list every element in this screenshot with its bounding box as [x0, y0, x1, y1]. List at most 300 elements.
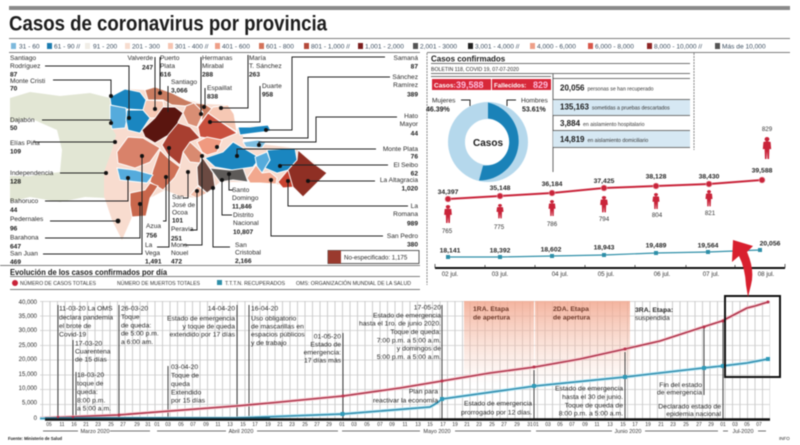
icons: fallecidos por día	[444, 137, 771, 223]
map labels: east: Sánchez	[392, 74, 418, 81]
map labels: east: Samaná	[393, 55, 418, 62]
fallecidos values: 786	[547, 221, 558, 228]
donut chart: casos por sexo: 53.61%	[522, 106, 547, 114]
annotation: 17 mayo: Estado de emergencia	[373, 312, 441, 320]
arrow: from box to July chart	[732, 240, 753, 297]
annotation: 3 abril: queda	[171, 381, 190, 388]
y axis labels: 0	[34, 416, 38, 422]
x axis labels: 15	[620, 422, 626, 428]
x axis labels: 31	[145, 422, 151, 428]
fallecidos values: 775	[494, 224, 505, 231]
x axis labels: 05	[364, 422, 370, 428]
annotation: toque de queda: a 5:00 a.m.	[77, 406, 111, 412]
x axis labels: 03	[545, 422, 551, 428]
teal line: recuperados	[440, 240, 781, 259]
map labels: west: Elías Piña	[10, 140, 40, 147]
map labels: east: 389	[407, 92, 418, 98]
annotation: 16 abril: y de trabajo	[251, 340, 287, 347]
annotation: 3 abril: 03-04-20	[171, 364, 198, 371]
x axis labels: 29	[134, 422, 140, 428]
legend: colour scale: 1,001 - 2,000	[365, 44, 404, 50]
map labels: south: San	[235, 242, 247, 249]
annotation: 14 abril: 14-04-20	[208, 306, 235, 312]
annotation: toque de queda: 18-03-20	[77, 372, 104, 379]
y axis labels: 5,000	[22, 400, 38, 406]
annotation: 1 mayo: emergencia:	[304, 350, 341, 356]
annotation: epidemia: epidemia nacional	[666, 411, 721, 418]
map labels: west: Monte Cristi	[10, 78, 46, 85]
annotation: 14 abril: Estado de emergencia	[167, 316, 235, 322]
map labels: west: Santiago	[10, 55, 36, 62]
x axis labels	[46, 422, 762, 428]
stats list: 135,163 sometidas a pruebas descartados	[560, 102, 670, 112]
annotation: toque de queda: 8:00 p.m.	[77, 398, 105, 404]
annotation: tercera etapa: suspendida	[635, 315, 670, 322]
map labels: north: Espaillat	[207, 85, 232, 92]
y axis labels: 25,000	[19, 343, 38, 349]
teal line: recuperados: 19,489	[646, 242, 667, 250]
map labels: south: Cristobal	[235, 250, 262, 256]
teal line: recuperados: 18,141	[440, 248, 461, 254]
map labels: north: Santiago	[171, 79, 197, 86]
y axis labels: 40,000	[19, 300, 38, 306]
x axis labels: 25	[108, 422, 114, 428]
legend: colour scale: 31 - 60	[19, 44, 40, 50]
annotation: fin estado: Fin del estado	[659, 382, 702, 389]
map labels: south: José de	[172, 202, 195, 209]
x axis labels: 07	[190, 422, 196, 428]
map labels: north: 288	[202, 72, 213, 78]
teal line: recuperados: 18,943	[594, 244, 615, 252]
map labels: south: Vega	[145, 250, 160, 257]
annotation: 30 junio: 8:00 p.m. a 5:00 a.m.	[559, 410, 623, 418]
donut chart: casos por sexo: Mujeres	[432, 98, 456, 104]
red line: casos: 38,128	[646, 174, 667, 180]
map labels: east: La Altagracia	[380, 177, 418, 184]
x axis labels: 05	[46, 422, 52, 428]
teal line: recuperados: 19,564	[698, 242, 719, 250]
x axis labels: 25	[489, 422, 495, 428]
legend: colour scale: 401 - 600	[222, 44, 250, 50]
fallecidos values: 804	[652, 212, 663, 219]
legend: colour scale: 6,000 - 8,000	[595, 44, 634, 50]
red line: casos: 34,397	[438, 189, 459, 196]
teal line: recuperados: 20,056	[760, 240, 781, 248]
annotation: cuarentena: Cuarentena	[75, 348, 111, 356]
legend: evolución: T.T.T.N. RECUPERADOS	[225, 281, 286, 287]
x axis labels: 03	[732, 422, 738, 428]
map labels: south: Domingo	[232, 195, 259, 202]
source: Fuente: Ministerio de Salud	[8, 436, 62, 441]
x axis labels: 09	[582, 422, 588, 428]
band: primera etapa de apertura	[464, 301, 534, 385]
event lines	[58, 305, 723, 419]
stats list	[553, 84, 690, 148]
map labels: south	[145, 187, 262, 266]
map labels: south: Nouel	[171, 250, 189, 257]
annotation: cuarentena: 17-03-20	[75, 340, 102, 348]
fallecidos values	[442, 126, 773, 235]
x axis labels: 07	[756, 422, 762, 428]
legend: colour scale	[11, 43, 766, 50]
annotation: 3 abril: Extendido	[171, 390, 201, 396]
x axis labels: 23	[95, 422, 101, 428]
map labels: south: Nacional	[233, 220, 259, 227]
month labels: Junio 2020	[615, 429, 641, 435]
donut chart: casos por sexo	[426, 98, 548, 181]
x axis labels: 07	[377, 422, 383, 428]
date axis: 07 jul.	[703, 271, 720, 278]
legend: colour scale: 201 - 300	[132, 44, 160, 50]
annotation: 14 abril: extendido por 17 días	[170, 332, 236, 338]
map labels: north	[127, 55, 282, 100]
fallecidos values: 821	[705, 210, 716, 217]
annotation: plan: Plan para	[409, 388, 438, 396]
annotation: pandemia: el brote de	[59, 323, 91, 330]
map labels: south: 2,166	[235, 258, 252, 265]
map labels: west: 109	[10, 148, 21, 156]
map labels: south: Santo	[232, 187, 250, 194]
annotation: 14 abril: y toque de queda	[182, 324, 235, 330]
map labels: north: Hermanas	[202, 55, 233, 62]
x axis labels: 11	[402, 422, 408, 428]
annotation: 17 mayo: 5:00 p.m. a 5:00 a.m.	[377, 354, 441, 361]
x axis labels: 31	[527, 422, 533, 428]
stats list: 20,056 personas se han recuperado	[560, 84, 654, 92]
map labels: north: Plata	[160, 63, 175, 70]
y axis labels	[19, 300, 38, 422]
map labels: south: 251	[171, 236, 182, 242]
x axis labels: 21	[277, 422, 283, 428]
panel: casos confirmados	[426, 53, 694, 285]
fallecidos values: 765	[442, 228, 453, 235]
annotation: 26 marzo: Toque	[121, 314, 140, 321]
x axis labels: 17	[632, 422, 638, 428]
map labels: south: Mons.	[171, 242, 189, 249]
map labels: west: Dajabón	[10, 117, 35, 124]
map labels: west: 87	[10, 72, 18, 78]
date axis: 08 jul.	[758, 271, 775, 278]
teal line: recuperados: 18,392	[490, 248, 511, 254]
map labels: east: Hato	[404, 113, 418, 120]
y axis labels: 35,000	[19, 314, 38, 320]
annotation: 3 abril: Toque de	[171, 372, 199, 380]
legend: colour scale: 3,001 - 4,000 //	[475, 44, 520, 50]
x axis labels: 27	[696, 422, 702, 428]
annotation: 30 junio: hasta el 30 de junio.	[562, 394, 623, 401]
x axis labels: 11	[215, 422, 221, 428]
map: Dominican Republic silhouette	[104, 87, 327, 240]
x axis labels: 29	[514, 422, 520, 428]
x axis labels: 19	[265, 422, 271, 428]
fallecidos values: 829	[762, 126, 773, 133]
x axis labels: 25	[302, 422, 308, 428]
x axis labels: 29	[708, 422, 714, 428]
x axis labels: 11	[594, 422, 600, 428]
date axis: 05 jul.	[598, 271, 615, 278]
red line: casos: 37,425	[594, 178, 615, 185]
legend: evolución: NÚMERO DE CASOS TOTALES	[20, 280, 97, 287]
x axis labels: 23	[476, 422, 482, 428]
map labels: north: María	[249, 55, 266, 62]
line: casos totales	[40, 302, 768, 418]
teal line: recuperados: 18,602	[541, 246, 562, 254]
map labels: south: Azua	[146, 223, 161, 230]
annotation: plan: reactivar la economía	[373, 398, 438, 404]
map labels: east: 989	[407, 220, 418, 228]
credit: INFO	[779, 436, 790, 441]
annotation: primera etapa: 1RA. Etapa	[473, 306, 509, 313]
red box: fallecidos: Fallecidos:	[494, 82, 526, 90]
annotation: prorrogado: Estado de emergencia	[464, 400, 532, 408]
map labels: south: 11,846	[232, 204, 252, 210]
x axis labels: 17	[252, 422, 258, 428]
legend: colour scale: 91 - 200	[93, 44, 118, 50]
map labels: south: 101	[172, 218, 183, 224]
map labels: east: Monte Plata	[383, 146, 418, 153]
fallecidos values: 794	[599, 216, 610, 223]
x axis labels: 01	[533, 422, 539, 428]
x axis labels: 27	[501, 422, 507, 428]
legend: evolución: NÚMERO DE MUERTOS TOTALES	[117, 280, 201, 287]
x axis labels: 01	[720, 422, 726, 428]
donut chart: casos por sexo: Hombres	[521, 98, 548, 104]
date axis: 03 jul.	[492, 271, 509, 278]
x axis labels: 03	[165, 422, 171, 428]
map labels: south: Peravia	[171, 226, 194, 233]
date axis: 02 jul.	[442, 271, 459, 278]
x axis labels: 16	[71, 422, 77, 428]
x axis labels: 27	[314, 422, 320, 428]
annotation: 1 mayo: 17 días más	[304, 358, 342, 364]
x axis labels: 23	[670, 422, 676, 428]
map labels: west	[10, 55, 54, 266]
section heading: evolución: Evolución de los casos confirmados por día	[10, 268, 168, 277]
map labels: east: 1,020	[401, 186, 418, 192]
map labels: north: 958	[262, 92, 273, 98]
map labels: north: Duarte	[262, 83, 282, 90]
annotation: 26 marzo: de 5:00 p.m.	[121, 330, 159, 338]
red line: casos: 35,148	[490, 185, 511, 192]
bulletin line: BOLETIN 118, COVID 19, 07-07-2020	[431, 67, 519, 73]
map labels: west: 44	[10, 207, 18, 214]
x axis labels: 13	[607, 422, 613, 428]
legend: colour scale: 61 - 90 //	[54, 44, 80, 50]
map labels: north: 838	[207, 94, 218, 100]
x axis labels: 23	[289, 422, 295, 428]
map labels: south: Distrito	[233, 212, 254, 219]
panel heading: Casos confirmados	[431, 54, 506, 64]
annotation: 17 mayo: Toque de queda:	[390, 329, 441, 336]
annotation: 3 abril: por 15 días	[171, 398, 206, 404]
annotation: 30 junio: Estado de emergencia	[555, 386, 623, 392]
map labels: west: 96	[10, 226, 18, 232]
annotation: pandemia: 11-03-20 La OMS	[59, 306, 113, 312]
annotation: cuarentena: de 15 días	[75, 356, 107, 364]
map labels: north: 616	[160, 72, 171, 78]
map labels: east: Ramírez	[393, 82, 418, 89]
map labels: south: 756	[146, 232, 157, 240]
x axis labels: 17	[440, 422, 446, 428]
annotation: epidemia: Declarado estado de	[658, 404, 721, 410]
legend: colour scale: 8,000 - 10,000 //	[654, 44, 702, 50]
map labels: west: Barahona	[10, 234, 39, 242]
x axis labels: 19	[645, 422, 651, 428]
map labels: east: Romana	[393, 211, 418, 218]
callout: no especificado	[328, 250, 419, 264]
annotation: segunda etapa: de apertura	[553, 314, 590, 322]
annotation: 30 junio: Toque de queda de	[565, 402, 623, 410]
red line: casos: 38,430	[699, 174, 720, 180]
annotation: 17 mayo: 17-05-20	[414, 304, 441, 312]
red box: fallecidos: 829	[533, 80, 548, 90]
stats list: 3,884 en aislamiento hospitalario	[560, 119, 645, 128]
map labels: south: Ocoa	[172, 210, 188, 216]
grid	[42, 301, 770, 419]
x axis labels: 05	[557, 422, 563, 428]
area chart: evolución de casos	[19, 296, 780, 435]
annotation: 16 abril: Uso obligatorio	[251, 316, 297, 322]
map labels: south: 472	[171, 258, 182, 266]
map labels: east	[380, 55, 419, 248]
annotation: fin estado: de emergencia	[657, 390, 702, 396]
map labels: west: Pedernales	[10, 216, 44, 223]
x axis labels: 09	[389, 422, 395, 428]
x axis labels: 21	[658, 422, 664, 428]
map labels: west: 647	[10, 244, 21, 250]
month labels: Abril 2020	[229, 429, 253, 435]
red line: casos: 36,184	[542, 181, 563, 188]
annotation: 26 marzo: de queda:	[121, 322, 151, 330]
month labels: Jul-2020	[732, 429, 754, 435]
map labels: west: 50	[10, 125, 18, 132]
map labels: east: 76	[411, 154, 418, 160]
map: provinces	[110, 87, 327, 217]
month labels: Marzo 2020	[80, 429, 110, 435]
map labels: west: San Juan	[10, 250, 38, 258]
band: segunda etapa de apertura	[535, 301, 630, 385]
map labels: north: 3,066	[171, 88, 188, 94]
line chart: casos, muertes y recuperados julio	[435, 126, 785, 278]
legend: colour scale: 301 - 400 //	[175, 44, 209, 50]
date axis: 04 jul.	[552, 271, 569, 278]
month labels	[43, 429, 766, 435]
annotation: segunda etapa: 2DA. Etapa	[553, 306, 589, 313]
x axis labels: 01	[339, 422, 345, 428]
legend: colour scale: 4,000 - 6,000	[537, 44, 576, 50]
event markers	[57, 300, 770, 418]
red line: casos	[438, 168, 773, 202]
map labels: north: Mirabal	[202, 63, 224, 70]
annotation: toque de queda: toque de	[77, 380, 104, 388]
annotation: tercera etapa: 3RA. Etapa:	[635, 307, 673, 314]
legend: evolución	[12, 280, 411, 287]
map labels: east: Mayor	[400, 121, 419, 128]
annotation: prorrogado: prorrogado por 12 días.	[461, 410, 532, 416]
map labels: east: 380	[407, 242, 418, 248]
annotation: 1 mayo: Estado de	[310, 342, 341, 348]
map labels: west: Rodríguez	[10, 63, 40, 70]
x axis labels: 19	[452, 422, 458, 428]
map: Haiti	[10, 92, 117, 202]
map labels: east: 87	[411, 64, 418, 70]
legend: colour scale: 2,001 - 3000	[420, 44, 457, 50]
x axis labels: 07	[569, 422, 575, 428]
map labels: south: La	[145, 242, 153, 249]
map labels: north: 263	[249, 72, 260, 78]
map labels: east: 62	[411, 170, 418, 178]
annotation: 26 marzo: a 6:00 am.	[121, 339, 153, 346]
map labels: north: Valverde	[127, 55, 153, 62]
red box: casos: 39,588	[456, 80, 484, 90]
map labels: west: 469	[10, 259, 21, 266]
highlight box: julio	[725, 296, 780, 377]
x axis labels: 05	[178, 422, 184, 428]
map leader lines	[33, 55, 408, 254]
map labels: north: Puerto	[160, 55, 180, 62]
map labels: west: Bahoruco	[10, 198, 39, 205]
red box: fallecidos	[492, 79, 551, 90]
x axis labels: 27	[120, 422, 126, 428]
x axis labels: 29	[326, 422, 332, 428]
annotation: 17 mayo: 7:00 p.m. a 5:00 a.m.	[377, 338, 441, 344]
red box: casos	[432, 79, 491, 90]
map labels: north: T. Sánchez	[249, 63, 282, 70]
annotation: 17 mayo: y domingos de	[397, 346, 441, 352]
y axis labels: 30,000	[19, 328, 38, 334]
x axis labels: 09	[203, 422, 209, 428]
red box: casos: Casos:	[434, 82, 456, 90]
annotation: 1 mayo: 01-05-20	[314, 334, 341, 340]
x axis labels: 05	[744, 422, 750, 428]
map labels: south: 10,807	[233, 229, 254, 236]
annotation: 16 abril: 16-04-20	[251, 306, 278, 312]
x axis labels: 21	[83, 422, 89, 428]
date axis: 06 jul.	[654, 271, 671, 278]
donut chart: casos por sexo: Casos	[473, 138, 503, 149]
legend: evolución: OMS: ORGANIZACIÓN MUNDIAL DE LA SALUD	[296, 280, 411, 287]
x axis labels: 03	[351, 422, 357, 428]
annotation: toque de queda: queda:	[77, 389, 98, 396]
map labels: east: 44	[411, 130, 418, 138]
x axis labels: 21	[464, 422, 470, 428]
x axis labels: 13	[415, 422, 421, 428]
annotation: pandemia: declara pandemia	[59, 314, 113, 322]
map labels: west: 128	[10, 178, 21, 186]
line: recuperados	[40, 359, 768, 418]
callout: no especificado: No-especificado: 1,175	[344, 254, 408, 262]
y axis labels: 20,000	[19, 357, 38, 363]
stats list: 14,819 en aislamiento domiciliario	[560, 135, 648, 144]
map labels: north: 247	[142, 64, 153, 72]
month labels: Mayo 2020	[423, 429, 451, 435]
legend: colour scale: Más de 10,000	[722, 44, 766, 50]
map labels: east: San Pedro	[387, 233, 418, 240]
annotation: 17 mayo: hasta el 1ro. de junio 2020.	[359, 320, 441, 328]
map labels: east: El Seibo	[393, 162, 418, 169]
annotation: 16 abril: espacios públicos	[251, 332, 305, 338]
map labels: south: 1,491	[145, 258, 162, 266]
red line: casos: 39,588	[752, 168, 773, 174]
map labels: west: Independencia	[10, 170, 54, 177]
map labels: east: La	[411, 203, 418, 210]
map labels: south: San	[172, 194, 184, 201]
y axis labels: 15,000	[19, 372, 38, 378]
legend: colour scale: 801 - 1,000 //	[311, 44, 350, 50]
x axis labels: 01	[154, 422, 160, 428]
x axis labels: 15	[427, 422, 433, 428]
annotation: primera etapa: de apertura	[473, 314, 510, 322]
